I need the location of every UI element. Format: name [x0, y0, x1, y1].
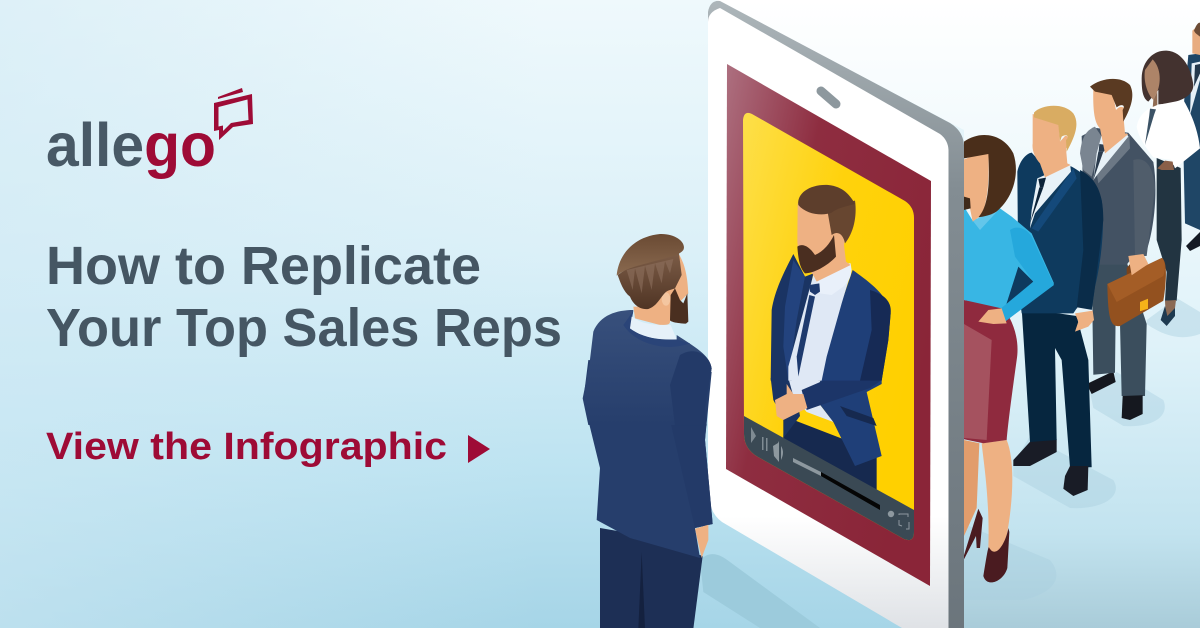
- maroon screen: [726, 64, 931, 586]
- volume icon: [773, 441, 783, 462]
- icon: play arrow: [468, 435, 490, 463]
- jacket lower: [583, 360, 713, 558]
- floor shadow of tablet: [700, 554, 820, 628]
- pause icon: [762, 437, 768, 451]
- person: far right: [1183, 23, 1200, 230]
- person: man in navy suit: [1013, 106, 1103, 496]
- hair back ridges: [627, 259, 673, 293]
- settings icon: [888, 511, 894, 517]
- call to action: [46, 426, 490, 468]
- collar: [630, 317, 677, 339]
- people queue: [964, 23, 1200, 600]
- person: man in grey suit: [1080, 79, 1166, 420]
- ear: [662, 292, 670, 306]
- play icon: [751, 427, 756, 443]
- person: woman in white blouse: [1137, 51, 1200, 326]
- presenter upper body and head: [771, 185, 891, 381]
- logo speech bubble icon: [214, 88, 253, 140]
- floor shadows: [964, 298, 1200, 600]
- trousers: [600, 528, 703, 628]
- presenter lower body: [771, 320, 888, 494]
- yellow video panel: [743, 113, 914, 540]
- title line 1: How to Replicate: [46, 236, 481, 296]
- hair top: [617, 234, 684, 276]
- far person shoe: [1186, 232, 1200, 251]
- video control bar: [744, 416, 914, 540]
- fullscreen icon: [899, 514, 909, 529]
- title: [46, 236, 562, 358]
- hair back: [618, 248, 682, 309]
- logo wordmark: allego: [46, 111, 216, 179]
- hand: [695, 525, 708, 558]
- person: woman in blue top: [964, 135, 1054, 582]
- video presenter: [771, 185, 891, 494]
- tablet side edge: [708, 1, 964, 628]
- briefcase: [1107, 254, 1166, 326]
- back man upper body and head: [583, 234, 712, 426]
- beard: [670, 288, 688, 324]
- camera slot: [821, 91, 836, 104]
- tablet device: [708, 1, 964, 628]
- title line 2: Your Top Sales Reps: [46, 298, 562, 358]
- tablet white face: [708, 8, 948, 628]
- call to action text: View the Infographic: [46, 426, 447, 468]
- presenter man viewed from behind: [583, 234, 713, 628]
- progress bar: [793, 458, 821, 476]
- jacket upper: [583, 310, 712, 425]
- neck and face: [633, 248, 688, 325]
- logo: allego: [46, 88, 253, 179]
- presenter hand: [775, 384, 807, 420]
